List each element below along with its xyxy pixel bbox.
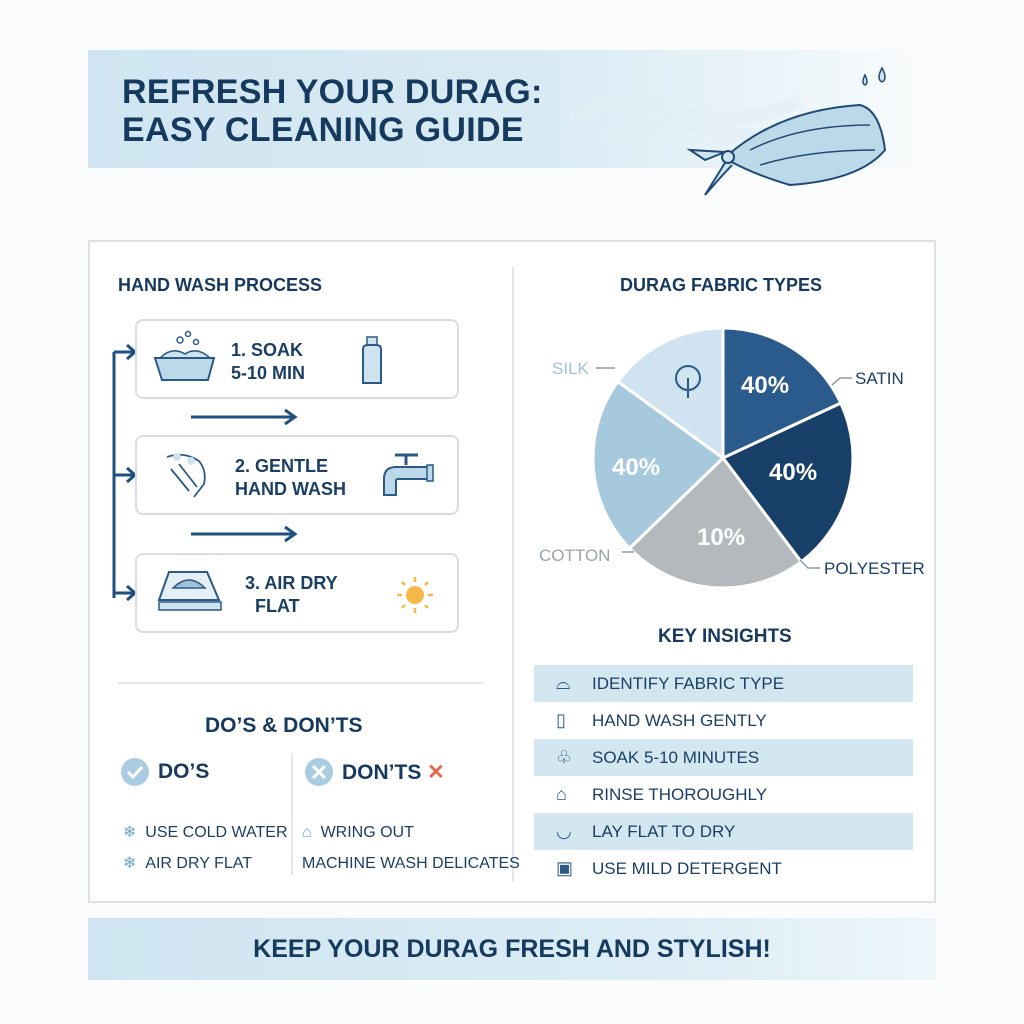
heading: hand wash process: HAND WASH PROCESS: [118, 275, 322, 295]
step 1 card: 5-10 MIN: [231, 363, 305, 383]
pie chart: POLYESTER: [824, 559, 925, 578]
heading: key insights: KEY INSIGHTS: [658, 626, 792, 647]
step 1 card: [135, 319, 459, 399]
pie chart: SILK: [552, 359, 590, 378]
icon: faucet: [383, 454, 434, 496]
icon: check: [121, 758, 149, 786]
pie chart: 40%: [612, 454, 660, 481]
dos column: ❄ USE COLD WATER: [123, 824, 288, 841]
pie chart: [539, 330, 925, 586]
main panel: [88, 240, 936, 903]
icon: drying rack: [158, 571, 222, 611]
flow connector arrows: [112, 344, 298, 602]
pie chart: COTTON: [539, 546, 610, 565]
step 2 card: HAND WASH: [235, 479, 346, 499]
heading: dos and donts: DO’S & DON’TS: [205, 714, 363, 737]
step 1 card: 1. SOAK: [231, 340, 303, 360]
key insights list: USE MILD DETERGENT: [592, 859, 782, 878]
step 3 card: 3. AIR DRY: [245, 573, 338, 593]
key insights list: ⌂: [556, 784, 567, 804]
donts column: DON’TS ✕: [342, 761, 445, 784]
footer banner: KEEP YOUR DURAG FRESH AND STYLISH!: [253, 935, 771, 963]
donts column: ⌂ WRING OUT: [302, 824, 414, 841]
key insights list: ⌓: [556, 673, 570, 693]
icon: durag illustration: [686, 66, 886, 196]
key insights list: IDENTIFY FABRIC TYPE: [592, 674, 784, 693]
pie chart: 40%: [741, 372, 789, 399]
key insights list: ♧: [556, 747, 572, 767]
key insights list: SOAK 5-10 MINUTES: [592, 748, 759, 767]
key insights list: [534, 665, 913, 878]
icon: x circle: [305, 758, 333, 786]
dos column: [121, 758, 288, 872]
step 3 card: FLAT: [255, 596, 300, 616]
key insights list: RINSE THOROUGHLY: [592, 785, 767, 804]
step 2 card: 2. GENTLE: [235, 456, 328, 476]
key insights list: LAY FLAT TO DRY: [592, 822, 735, 841]
title: EASY CLEANING GUIDE: [122, 111, 524, 149]
key insights list: ▯: [556, 710, 566, 730]
donts column: [302, 758, 520, 872]
pie chart: 40%: [769, 459, 817, 486]
dos column: DO’S: [158, 760, 209, 783]
icon: washing hands: [166, 453, 206, 498]
pie chart: SATIN: [855, 369, 904, 388]
pie chart: 10%: [697, 524, 745, 551]
key insights list: ▣: [556, 858, 573, 878]
step 3 card: [135, 553, 459, 633]
donts column: MACHINE WASH DELICATES: [302, 855, 520, 872]
key insights list: ◡: [556, 821, 572, 841]
title: [122, 73, 543, 149]
icon: sun: [397, 577, 433, 613]
header banner: [88, 50, 936, 168]
icon: basin: [154, 330, 216, 381]
step 2 card: [135, 435, 459, 515]
key insights list: HAND WASH GENTLY: [592, 711, 767, 730]
dos column: ❄ AIR DRY FLAT: [123, 855, 252, 872]
footer banner: [88, 918, 936, 980]
icon: detergent bottle: [362, 336, 382, 384]
title: REFRESH YOUR DURAG:: [122, 73, 543, 111]
heading: fabric types: DURAG FABRIC TYPES: [620, 275, 822, 295]
